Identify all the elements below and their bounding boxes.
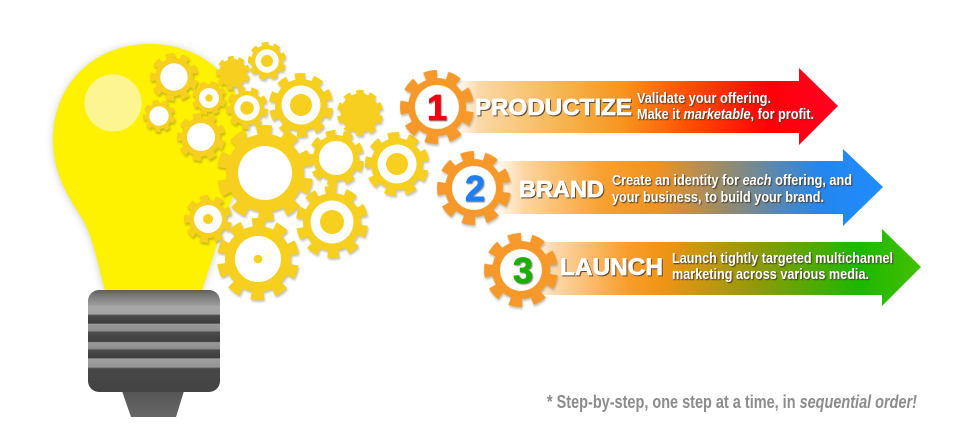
gear 14 [184,195,232,243]
gear 4 [216,56,250,90]
step 2: brand [439,149,883,226]
description 2: Create an identity for each offering, and [612,173,852,189]
gear 2 [144,101,174,131]
gear badge 3 [486,235,556,305]
gear 9 [337,90,383,136]
description 3: Launch tightly targeted multichannel [672,251,893,267]
gear 11 [308,130,364,186]
light bulb [53,44,247,417]
gear 8 [271,75,331,135]
step 3: launch [486,229,921,306]
bulb neck [122,391,184,417]
gear 6 [228,89,266,127]
bulb glass [53,44,247,291]
heading productize: PRODUCTIZE [475,94,632,120]
gear 15 [217,218,299,300]
gear badge 1 [402,72,472,142]
gear 13 [298,188,366,256]
description 3: marketing across various media. [672,267,869,283]
arrow 1 [456,68,838,145]
description 3 [672,251,893,283]
description 1: Make it marketable, for profit. [637,107,814,123]
number 2: 2 [465,168,485,209]
arrow 3 [530,229,921,306]
step 1: productize [402,68,838,145]
description 1: Validate your offering. [637,91,771,107]
number 1: 1 [427,87,447,128]
gear 12 [364,131,430,197]
gear 5 [247,41,287,81]
number 3: 3 [513,250,533,291]
bulb highlight [84,74,142,132]
gear 10 [218,126,312,220]
description 2 [612,173,852,206]
heading launch: LAUNCH [560,254,663,281]
heading brand: BRAND [519,176,604,202]
gear 1 [150,53,198,101]
footnote: * Step-by-step, one step at a time, in sequential order! [547,392,917,412]
description 2: your business, to build your brand. [612,190,824,206]
description 1 [637,91,814,123]
arrow 2 [493,149,883,226]
gears cluster [144,41,430,300]
gear badge 2 [439,153,509,223]
bulb screw base [88,290,220,392]
gear 7 [177,113,225,161]
gear 3 [193,82,225,114]
